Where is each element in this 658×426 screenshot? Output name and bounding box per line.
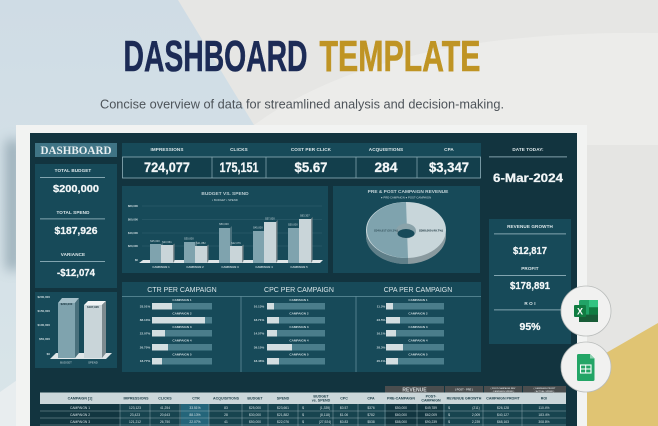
table header row: CLICKS (158, 396, 172, 400)
table body rows: 2,009 (472, 413, 480, 417)
title: DASHBOARD (124, 32, 308, 81)
table header row: CAMPAIGN [1] (68, 396, 92, 400)
chart: pre and post campaign revenue: $398,000 (49.7%) (419, 228, 443, 232)
table body rows: $90,239 (425, 420, 437, 424)
table body rows: 23,423 (130, 413, 140, 417)
table body rows: 2,239 (472, 420, 480, 424)
table header row: ACQUISITIONS (213, 396, 240, 400)
chart: CPC per campaign: CAMPAIGN 3 (289, 325, 309, 329)
panel: revenue metrics: $12,817 (513, 245, 547, 257)
table body rows: $376 (367, 406, 375, 410)
chart: budget vs spend: $80,000 (128, 204, 138, 208)
table header row: CAMPAIGN (421, 398, 441, 402)
panel: revenue metrics: $178,891 (510, 280, 550, 292)
chart: budget vs spend: CAMPAIGN 5 (290, 265, 308, 269)
panel: date today (489, 147, 567, 185)
chart: budget vs spend: BUDGET VS. SPEND (201, 191, 249, 197)
table body rows: $ (302, 413, 304, 417)
panel: KPI strip: $3,347 (429, 160, 469, 175)
chart: CPA per campaign: CAMPAIGN 3 (408, 325, 428, 329)
chart: budget vs spend: $25,000 (150, 239, 160, 243)
table body rows: $88,000 (395, 420, 407, 424)
chart: budget vs spend: $57,000 (265, 216, 275, 220)
chart: budget vs spend (122, 186, 328, 273)
table body rows: $ (448, 413, 450, 417)
table body rows: $26,128 (497, 406, 509, 410)
table body rows: CAMPAIGN 1 (70, 406, 90, 410)
table body rows: (211) (472, 406, 480, 410)
chart: total budget vs spend: $200,000 (37, 295, 50, 299)
chart: CTR per campaign: CAMPAIGN 2 (172, 312, 192, 316)
chart: CPA per campaign: 11.2% (377, 304, 386, 308)
chart: CPA per campaign: 20.1% (377, 359, 386, 363)
table header row: vs. SPEND (312, 398, 331, 402)
chart: CPC per campaign: 10.13% (254, 304, 264, 308)
panel: KPI strip: CPA (444, 147, 454, 152)
chart: CTR per campaign: 22.07% (140, 332, 150, 336)
chart: total budget vs spend: BUDGET (60, 360, 72, 364)
chart: budget vs spend: ▪ BUDGET ▪ SPEND (212, 198, 238, 202)
icon: excel: X (577, 306, 583, 316)
chart: budget vs spend: $0 (135, 258, 138, 262)
panel: per campaign bar charts (122, 282, 481, 372)
table body rows: $21,882 (277, 413, 289, 417)
chart: budget vs spend: $40,000 (128, 231, 138, 235)
table body rows: 183.4% (538, 413, 550, 417)
panel: budget totals (35, 164, 117, 288)
table group headers: / ACTUAL SPEND ) (535, 390, 555, 393)
chart: pre and post campaign revenue (333, 186, 480, 273)
table body rows: $50,000 (249, 420, 261, 424)
table body rows (40, 404, 566, 426)
table header row: ROI (541, 396, 547, 400)
chart: CPC per campaign: 39.15% (254, 346, 264, 350)
chart: total budget vs spend: $200,000 (61, 302, 73, 306)
table body rows: $ (448, 406, 450, 410)
chart: total budget vs spend: $150,000 (37, 309, 50, 313)
chart: budget vs spend: $60,000 (128, 218, 138, 222)
panel: budget totals: TOTAL SPEND (56, 210, 90, 215)
table: campaign data (40, 386, 566, 426)
icon: google sheets (561, 342, 611, 392)
table header row: POST- (426, 394, 437, 398)
chart: CTR per campaign: 18.77% (140, 359, 150, 363)
subtitle: Concise overview of data for streamlined analysis and decision-making. (100, 96, 504, 112)
chart: budget vs spend: $50,000 (219, 222, 229, 226)
chart: CTR per campaign: 33.51% (140, 304, 150, 308)
table body rows: 26,750 (160, 420, 170, 424)
chart: total budget vs spend: $0 (47, 352, 50, 356)
panel: revenue metrics: PROFIT (521, 266, 539, 271)
chart: CPC per campaign: CPC PER CAMPAIGN (264, 287, 334, 294)
table body rows: $ (302, 406, 304, 410)
chart: pre and post campaign revenue: PRE & POST CAMPAIGN REVENUE (368, 189, 449, 195)
chart: CTR per campaign: CAMPAIGN 1 (172, 298, 192, 302)
chart: CTR per campaign: CTR PER CAMPAIGN (147, 287, 217, 294)
panel: revenue metrics: R O I (524, 301, 536, 306)
table body rows: $30,000 (249, 413, 261, 417)
panel: KPI strip: COST PER CLICK (291, 147, 332, 152)
table header row: REVENUE GROWTH (447, 396, 482, 400)
table body rows: $40,127 (497, 413, 509, 417)
panel: KPI strip: 175,151 (220, 160, 259, 175)
chart: budget vs spend: CAMPAIGN 3 (221, 265, 239, 269)
chart: CPA per campaign (377, 287, 452, 364)
panel: revenue metrics (489, 219, 571, 344)
table body rows: 110.4% (539, 406, 550, 410)
panel: KPI strip: ACQUISITIONS (369, 147, 403, 152)
chart: CPA per campaign: CAMPAIGN 5 (408, 352, 428, 356)
chart: CPA per campaign: 16.1% (377, 332, 386, 336)
chart: total budget vs spend: $50,000 (39, 337, 50, 341)
table group headers: - CAMPAIGN SPEND ) (492, 390, 515, 393)
table body rows: $25,000 (249, 406, 261, 410)
table group headers: ( CAMPAIGN PROFIT (534, 387, 556, 390)
table group headers: ( POST - PRE ) (455, 388, 473, 392)
panel: KPI strip: 284 (374, 160, 398, 175)
table body rows: 28 (224, 413, 228, 417)
table body rows: $1.06 (340, 413, 348, 417)
chart: CPC per campaign: 18.71% (254, 318, 264, 322)
chart: budget vs spend: CAMPAIGN 4 (255, 265, 273, 269)
table body rows: 22.07% (189, 420, 201, 424)
table header row: CTR (192, 396, 200, 400)
table body rows: $62,009 (425, 413, 437, 417)
table body rows: $50,000 (395, 406, 407, 410)
table header row: IMPRESSIONS (124, 396, 149, 400)
table group headers: ( POST-CAMPAIGN REV (491, 387, 516, 390)
table group headers (385, 386, 566, 394)
table body rows: (8,118) (320, 413, 330, 417)
table header row: CPC (340, 396, 348, 400)
chart: CPC per campaign (254, 287, 334, 364)
dashboard heading: DASHBOARD (40, 145, 112, 157)
panel: revenue metrics: 95% (520, 321, 541, 333)
chart: total budget vs spend: SPEND (88, 360, 98, 364)
icon: excel (561, 286, 611, 336)
title: TEMPLATE (320, 32, 480, 81)
table body rows: 41,254 (160, 406, 170, 410)
table header row (40, 392, 566, 404)
chart: CTR per campaign: CAMPAIGN 4 (172, 338, 192, 342)
panel: budget totals: $187,926 (54, 225, 98, 237)
panel: revenue metrics: REVENUE GROWTH (507, 224, 553, 229)
chart: budget vs spend: CAMPAIGN 1 (152, 265, 170, 269)
chart: total budget vs spend: $187,926 (87, 305, 99, 309)
table body rows: $22,076 (277, 420, 289, 424)
chart: CTR per campaign: CAMPAIGN 3 (172, 325, 192, 329)
panel: KPI strip: 724,077 (144, 160, 190, 175)
chart: CPA per campaign: 28.3% (377, 346, 386, 350)
table group headers: REVENUE (402, 388, 427, 394)
panel: budget totals: TOTAL BUDGET (55, 168, 91, 173)
table header row: CPA (367, 396, 375, 400)
chart: CPA per campaign: CAMPAIGN 2 (408, 312, 428, 316)
table body rows: 123,123 (129, 406, 141, 410)
table body rows: 83 (224, 406, 228, 410)
chart: budget vs spend: CAMPAIGN 2 (186, 265, 204, 269)
panel: KPI strip: IMPRESSIONS (150, 147, 184, 152)
table body rows: $0.83 (340, 420, 348, 424)
table body rows: $60,000 (395, 413, 407, 417)
panel: date today: 6-Mar-2024 (493, 171, 563, 185)
table header row: BUDGET (247, 396, 263, 400)
table header row: SPEND (277, 396, 290, 400)
chart: CPC per campaign: CAMPAIGN 1 (289, 298, 309, 302)
panel: KPI strip: $5.67 (294, 160, 328, 175)
chart: budget vs spend: $22,076 (231, 241, 241, 245)
chart: budget vs spend: $30,000 (184, 236, 194, 240)
table body rows: $0.57 (340, 406, 348, 410)
chart: budget vs spend: $50,000 (288, 222, 298, 226)
table body rows: (27,924) (319, 420, 331, 424)
chart: budget vs spend: $63,307 (300, 214, 310, 218)
table header row: CAMPAIGN PROFIT (486, 396, 521, 400)
chart: total budget vs spend (35, 292, 117, 368)
chart: CPA per campaign: CAMPAIGN 1 (408, 298, 428, 302)
chart: pre and post campaign revenue: ● PRE-CAMPAIGN ● POST-CAMPAIGN (381, 196, 431, 200)
chart: CTR per campaign: CAMPAIGN 5 (172, 352, 192, 356)
chart: CTR per campaign: 26.75% (140, 346, 150, 350)
chart: CPC per campaign: 18.46% (254, 359, 264, 363)
table body rows: CAMPAIGN 2 (70, 413, 90, 417)
panel: KPI strip: CLICKS (230, 147, 248, 152)
table body rows: $23,661 (277, 406, 289, 410)
table body rows: $ (302, 420, 304, 424)
chart: total budget vs spend: $100,000 (37, 323, 50, 327)
chart: CPC per campaign: CAMPAIGN 5 (289, 352, 309, 356)
chart: CPC per campaign: 14.57% (254, 332, 264, 336)
panel: date today: DATE TODAY: (512, 147, 544, 152)
table body rows: 308.8% (538, 420, 550, 424)
table body rows: 20,643 (160, 413, 170, 417)
table body rows: $538 (367, 420, 375, 424)
chart: CTR per campaign: 88.13% (140, 318, 150, 322)
table header row: BUDGET (313, 394, 329, 398)
chart: CPA per campaign: 23.5% (377, 318, 386, 322)
table body rows: $49,789 (425, 406, 437, 410)
table body rows: $68,163 (497, 420, 509, 424)
chart: pre and post campaign revenue: $349,917 (50.3%) (374, 228, 398, 232)
chart: budget vs spend: $45,000 (253, 226, 263, 230)
panel: KPI strip (122, 143, 481, 178)
panel: budget totals: $200,000 (53, 183, 99, 195)
panel: budget totals: -$12,074 (57, 267, 95, 279)
chart: CPC per campaign: CAMPAIGN 2 (289, 312, 309, 316)
table body rows: $ (448, 420, 450, 424)
table body rows: 121,212 (129, 420, 141, 424)
table body rows: CAMPAIGN 3 (70, 420, 90, 424)
chart: budget vs spend: $20,000 (128, 244, 138, 248)
table body rows: 33.51% (189, 406, 201, 410)
chart: CPA per campaign: CAMPAIGN 4 (408, 338, 428, 342)
chart: budget vs spend: $21,882 (196, 241, 206, 245)
chart: CTR per campaign (140, 287, 217, 364)
dashboard card (6, 125, 587, 426)
chart: CPC per campaign: CAMPAIGN 4 (289, 338, 309, 342)
chart: CPA per campaign: CPA PER CAMPAIGN (384, 287, 452, 294)
panel: budget totals: VARIANCE (61, 252, 85, 257)
table body rows: 41 (224, 420, 228, 424)
table body rows: $782 (367, 413, 375, 417)
table header row: PRE-CAMPAIGN (387, 396, 415, 400)
table body rows: (1,339) (320, 406, 330, 410)
table body rows: 88.13% (189, 413, 201, 417)
chart: budget vs spend: $23,661 (162, 240, 172, 244)
